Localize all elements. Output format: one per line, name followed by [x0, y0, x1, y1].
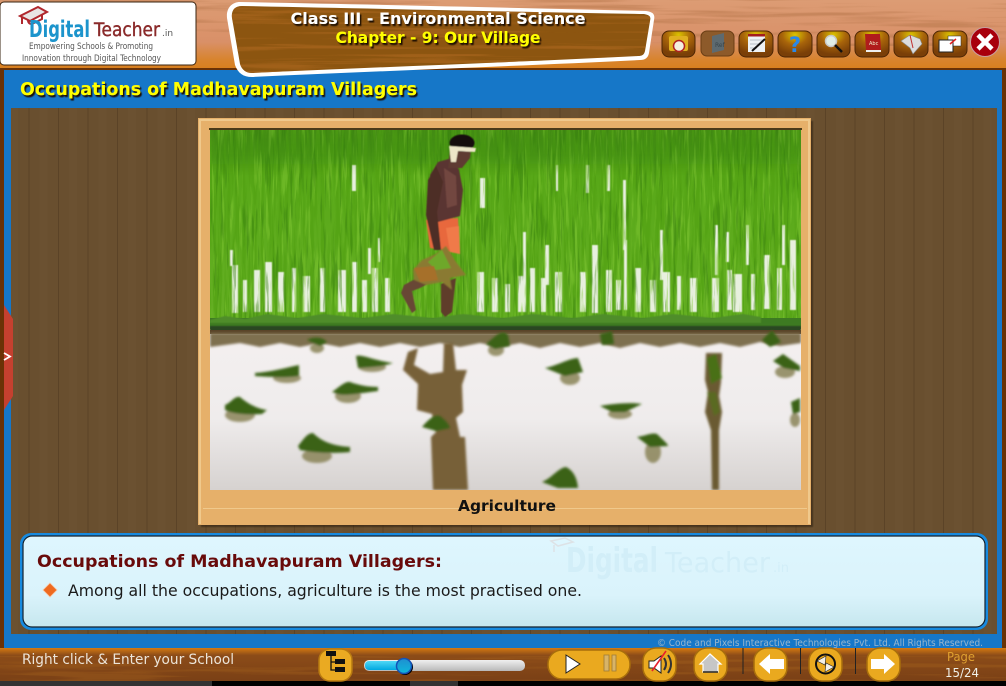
- page number: 15/24: [945, 666, 979, 680]
- icon: replay: [809, 648, 842, 681]
- chapter title: Chapter - 9: Our Village: [336, 28, 541, 47]
- chapter banner: [226, 2, 656, 78]
- icon: back arrow: [754, 648, 787, 681]
- rice blades base texture: [210, 130, 801, 320]
- icon: open book: [894, 31, 928, 57]
- back leg: [401, 270, 443, 313]
- pole-like seedling reflection: [705, 353, 722, 490]
- left side tab: [4, 305, 13, 410]
- bank of grass: [210, 314, 801, 331]
- watermark: Teacher: [664, 546, 770, 579]
- logo tagline: [22, 42, 161, 64]
- toolbar icons: [662, 28, 1000, 57]
- icon: graduation cap: [20, 7, 47, 24]
- logo wordmark: Teacher: [93, 19, 160, 41]
- logo card: [0, 2, 196, 65]
- white water streaks between rice rows: [230, 165, 796, 313]
- dividers: [742, 648, 856, 674]
- neck and head: [448, 148, 471, 168]
- torso: [430, 158, 463, 222]
- icon: reference book: [701, 31, 734, 56]
- icon: next arrow: [867, 648, 900, 681]
- logo tagline: Empowering Schools & Promoting: [29, 42, 153, 52]
- bullet text: Among all the occupations, agriculture is the most practised one.: [68, 581, 582, 600]
- icon: dictionary: Abc: [869, 41, 879, 47]
- reflection: farmer: [403, 343, 468, 490]
- section heading: Occupations of Madhavapuram Villagers: [20, 79, 417, 100]
- page label: Page: [947, 650, 975, 664]
- icon: dictionary: [855, 31, 889, 57]
- icon: muted speaker: [643, 648, 676, 681]
- watermark: .in: [773, 561, 789, 576]
- wooden plank content panel: [11, 108, 997, 634]
- progress slider: [364, 658, 525, 675]
- rice blades highlights and shadows: [210, 130, 801, 320]
- watermark: Digital: [566, 541, 658, 581]
- icon: sitemap button: [319, 649, 352, 681]
- icon: magnifier: [817, 31, 850, 57]
- water surface and reflection of the bank: [210, 331, 801, 490]
- copyright: © Code and Pixels Interactive Technologies Pvt. Ltd. All Rights Reserved.: [657, 638, 983, 649]
- photo frame: [198, 118, 813, 527]
- icon: help: [778, 31, 812, 57]
- head cloth: [449, 146, 476, 162]
- top wooden toolbar: [0, 0, 1006, 70]
- logo tagline: Innovation through Digital Technology: [22, 54, 161, 64]
- lower cloth: [426, 218, 460, 254]
- icon: notepad: [739, 31, 773, 57]
- school label: Right click & Enter your School: [22, 652, 234, 668]
- callout panel: [20, 533, 988, 630]
- logo wordmark: Digital: [29, 17, 90, 43]
- play and pause control: [548, 650, 630, 679]
- arm: [426, 166, 443, 250]
- watermark: [551, 538, 789, 581]
- course title: Class III - Environmental Science: [290, 9, 586, 28]
- icon: diamond bullet: [43, 583, 57, 597]
- logo wordmark: [29, 17, 173, 43]
- icon: help: ?: [789, 33, 801, 57]
- logo wordmark: .in: [162, 29, 173, 39]
- callout heading: Occupations of Madhavapuram Villagers:: [37, 552, 442, 572]
- icon: timer folder: [662, 31, 695, 57]
- rice seedling clumps: [225, 330, 800, 490]
- seedling bundle: [413, 246, 466, 290]
- bottom wooden control bar: [0, 648, 1006, 681]
- photo: farmer walking in a paddy field: [210, 130, 801, 490]
- icon: reference book: Ref: [715, 42, 726, 49]
- farmer figure: [401, 134, 476, 317]
- photo caption: Agriculture: [458, 497, 556, 515]
- icon: home: [694, 648, 727, 681]
- icon: window resize: [933, 31, 967, 57]
- icon: close: [970, 28, 1000, 56]
